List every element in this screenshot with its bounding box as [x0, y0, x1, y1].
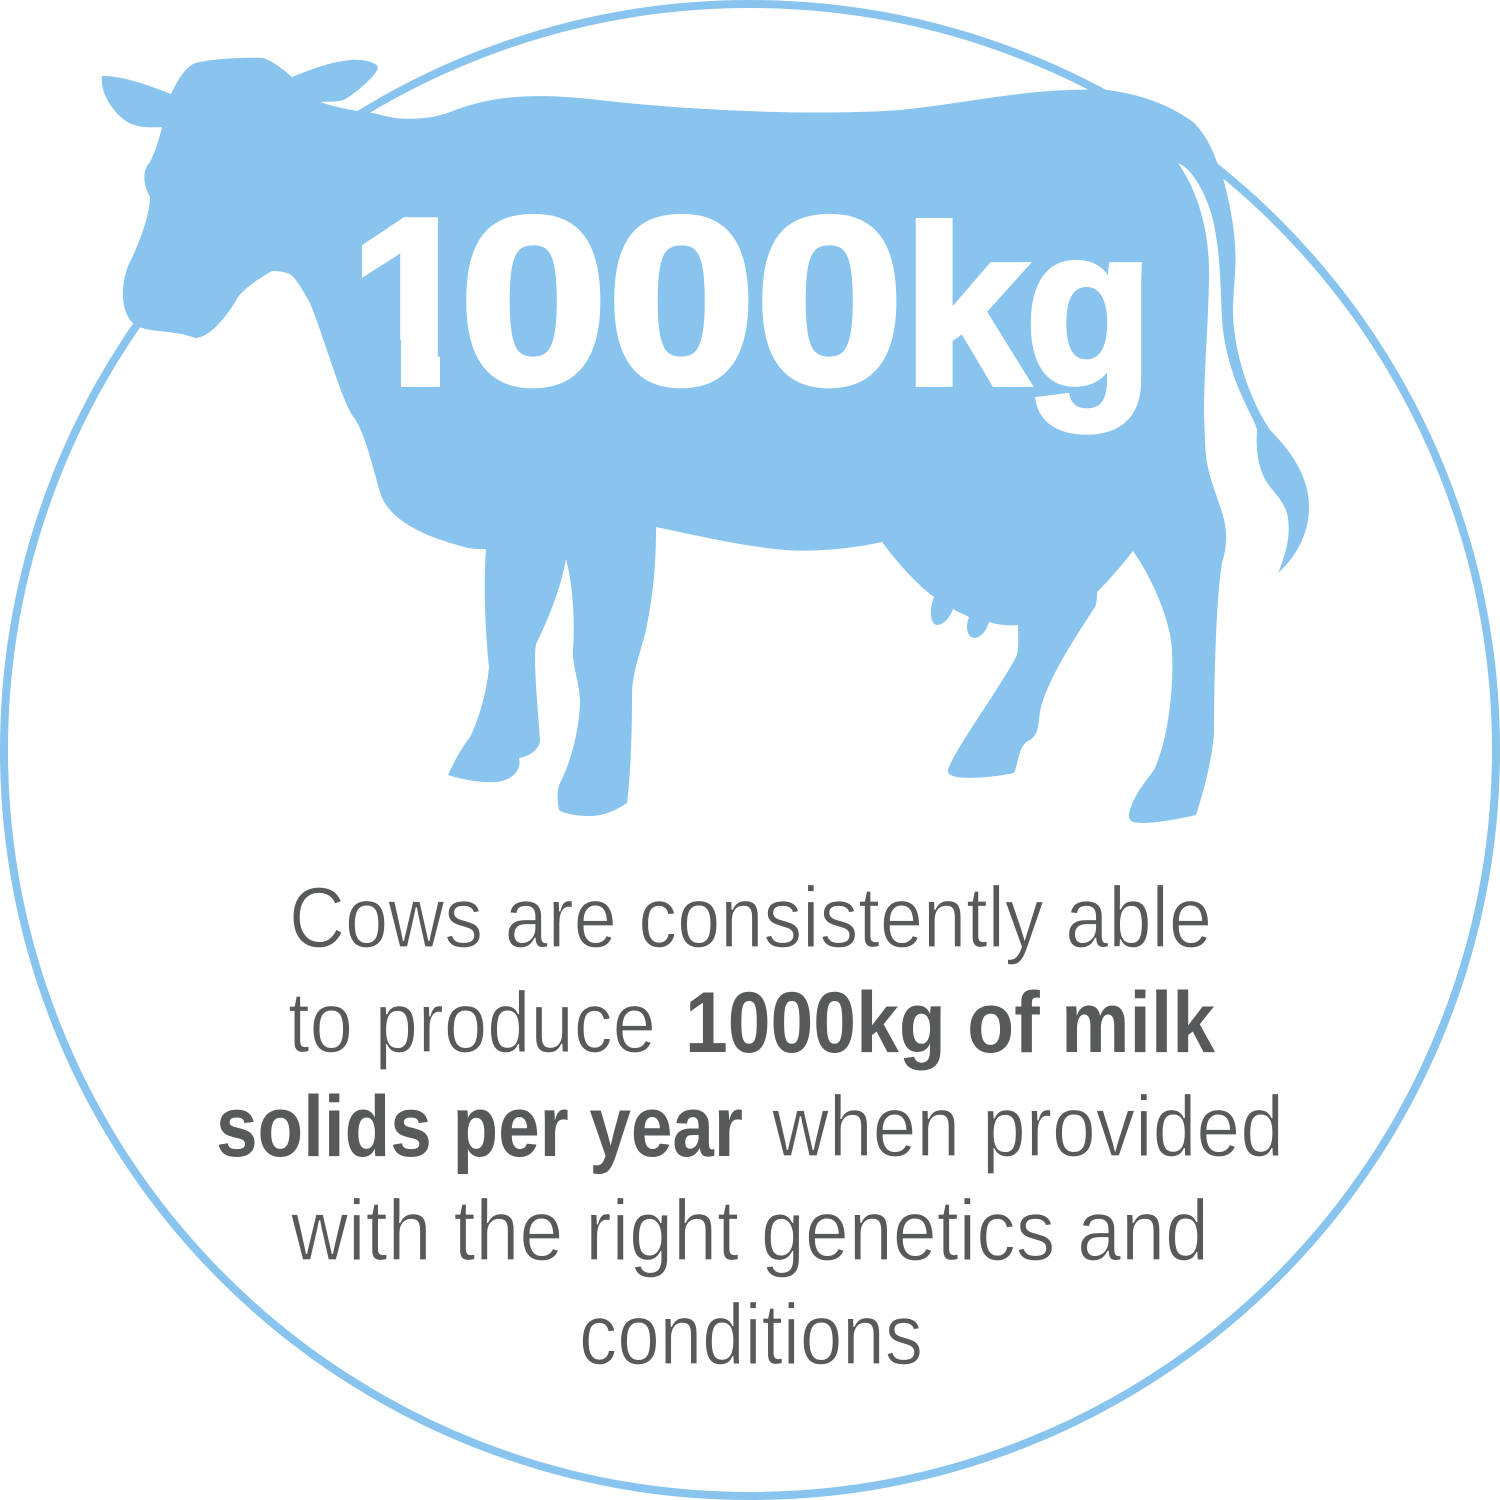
text block: description: to produce	[288, 975, 656, 1071]
text block: description: 1000kg of milk	[685, 975, 1215, 1071]
big figure: 1000kg: 0	[607, 169, 756, 434]
big figure: 1000kg: k	[903, 180, 1029, 432]
big figure: 1000kg: g	[1025, 180, 1153, 432]
text block: description: solids per year	[216, 1079, 743, 1175]
text block: description: Cows are consistently able	[289, 870, 1212, 966]
text block: description: with the right genetics and	[290, 1183, 1209, 1279]
big figure: 1000kg	[345, 169, 1153, 435]
text block: description: when provided	[771, 1079, 1284, 1175]
icon: cow silhouette	[102, 58, 1309, 823]
big figure: 1000kg: 0	[459, 169, 608, 434]
big figure: 1000kg: 0	[755, 169, 904, 434]
text block: description	[216, 870, 1284, 1383]
big figure: 1000kg: 1	[349, 170, 478, 435]
text block: description: conditions	[579, 1287, 923, 1383]
